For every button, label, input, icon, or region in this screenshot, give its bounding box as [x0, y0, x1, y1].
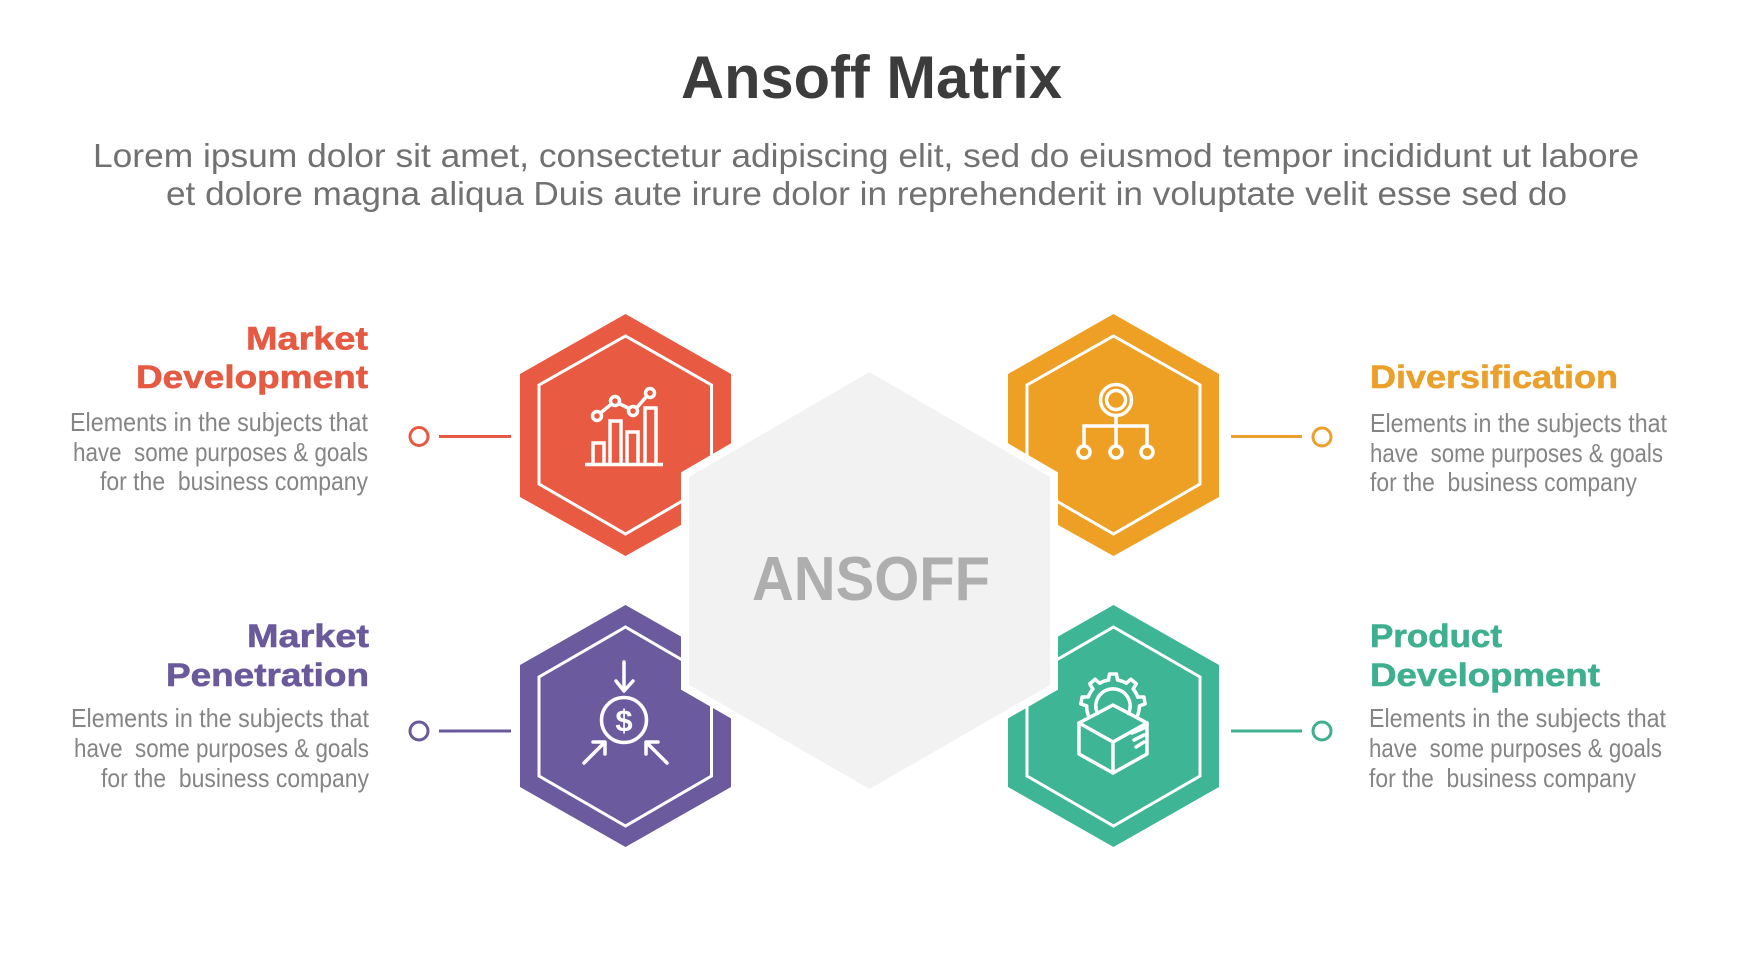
- icon: gear and box: [1079, 673, 1147, 773]
- panel: market penetration text: for the business company: [101, 763, 369, 793]
- panel: market development text: Elements in the subjects that: [70, 407, 369, 437]
- panel: market development text: have some purposes & goals: [73, 437, 368, 467]
- panel: product development text: for the business company: [1369, 763, 1636, 793]
- panel: market penetration text: Elements in the subjects that: [71, 703, 370, 733]
- panel: market penetration text: [71, 618, 370, 793]
- panel: market development text: Development: [136, 359, 368, 395]
- panel: market development text: Market: [246, 320, 368, 356]
- icon: money with inward arrows: $: [615, 703, 633, 738]
- title: Ansoff Matrix: [681, 44, 1062, 111]
- intro paragraph: [93, 137, 1639, 212]
- panel: product development text: Development: [1370, 657, 1600, 693]
- intro paragraph: Lorem ipsum dolor sit amet, consectetur adipiscing elit, sed do eiusmod tempor incididunt ut labore: [93, 137, 1639, 174]
- hexagon: market penetration: [520, 605, 731, 847]
- center label: ANSOFF: [752, 545, 990, 614]
- panel: diversification text: Elements in the subjects that: [1370, 408, 1668, 438]
- panel: market development text: [70, 320, 369, 496]
- connector: market development: [410, 428, 511, 446]
- panel: market development text: for the business company: [100, 466, 368, 496]
- hexagon: diversification: [1008, 314, 1219, 556]
- icon: bar chart with trend line: [585, 388, 663, 464]
- panel: market penetration text: have some purposes & goals: [74, 733, 369, 763]
- panel: diversification text: for the business company: [1370, 467, 1637, 497]
- panel: product development text: have some purposes & goals: [1369, 733, 1662, 763]
- intro paragraph: et dolore magna aliqua Duis aute irure dolor in reprehenderit in voluptate velit esse sed do: [166, 175, 1567, 212]
- connector: market penetration: [410, 722, 511, 740]
- center hexagon: [689, 372, 1050, 789]
- icon: hierarchy nodes: [1078, 384, 1153, 458]
- panel: diversification text: Diversification: [1370, 359, 1618, 395]
- panel: market penetration text: Market: [247, 618, 369, 654]
- panel: diversification text: [1370, 359, 1668, 497]
- icon: money with inward arrows: [584, 662, 667, 763]
- connector: diversification: [1231, 428, 1331, 446]
- panel: diversification text: have some purposes & goals: [1370, 438, 1663, 468]
- hexagon: product development: [1008, 605, 1219, 847]
- panel: product development text: [1369, 618, 1667, 793]
- panel: product development text: Product: [1370, 618, 1502, 654]
- connector: product development: [1231, 722, 1331, 740]
- panel: market penetration text: Penetration: [166, 657, 369, 693]
- panel: product development text: Elements in the subjects that: [1369, 703, 1667, 733]
- hexagon: market development: [520, 314, 731, 556]
